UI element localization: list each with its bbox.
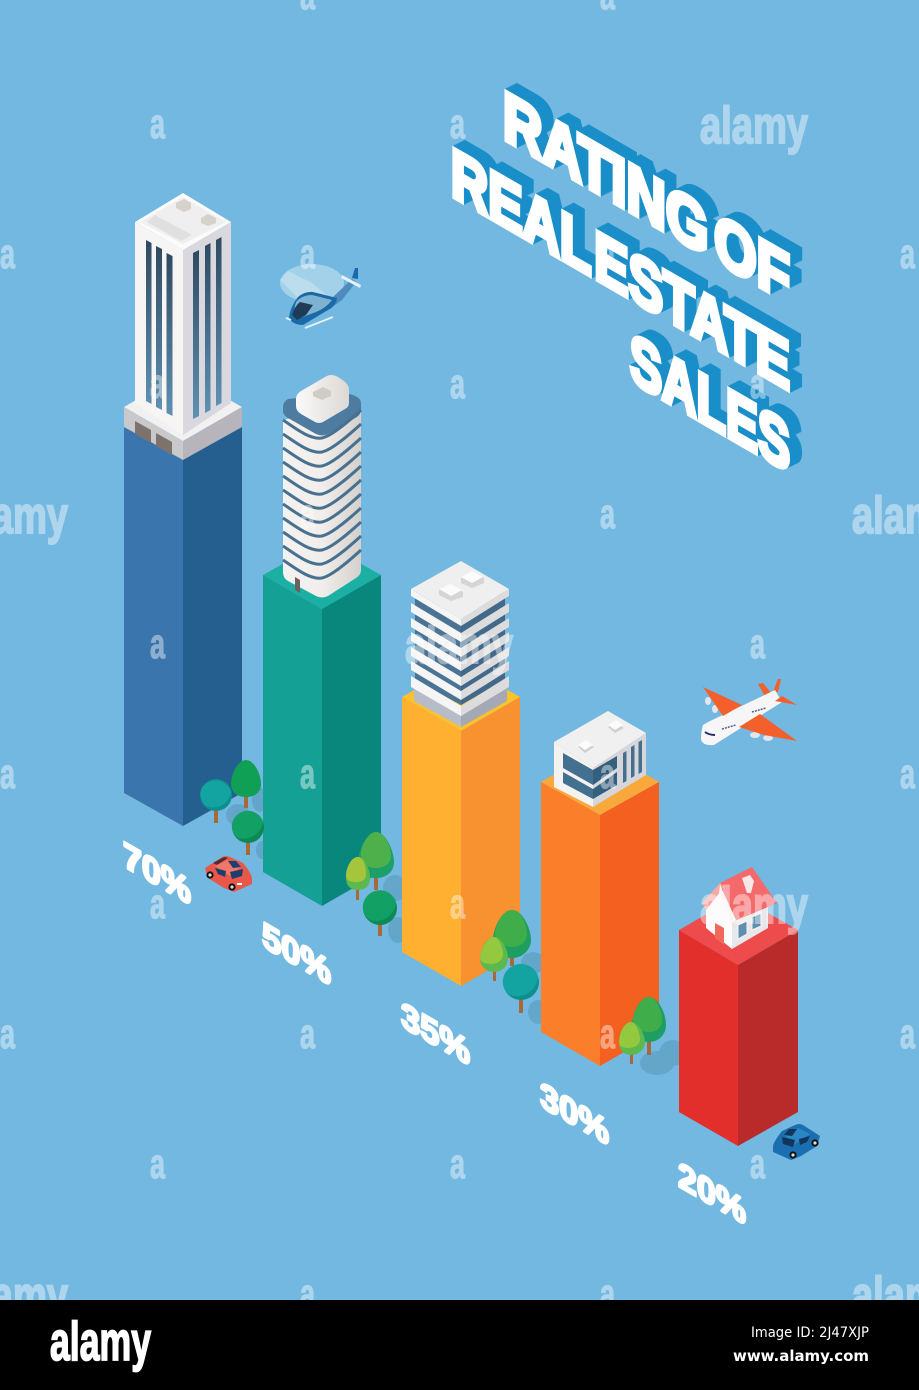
watermarks: a bbox=[600, 750, 615, 797]
tree group: beside teal bar bbox=[346, 832, 397, 936]
watermarks: a bbox=[150, 1140, 165, 1187]
icon: red car bbox=[205, 856, 252, 892]
title: REAL ESTATE bbox=[451, 133, 790, 405]
tree group: beside orange bar bbox=[619, 997, 666, 1064]
bar: 50% teal bbox=[263, 542, 381, 906]
footer bar bbox=[0, 1300, 919, 1390]
bar: 30% orange bbox=[541, 748, 659, 1066]
watermarks: a bbox=[0, 1010, 15, 1057]
building: low office on orange bar bbox=[554, 711, 646, 807]
bar: 20% red bbox=[679, 896, 798, 1146]
building: house on red bar bbox=[702, 867, 777, 949]
percentage labels: 50% bbox=[262, 915, 331, 994]
watermarks: a bbox=[600, 230, 615, 277]
watermarks: a bbox=[450, 360, 465, 407]
watermarks: a bbox=[750, 620, 765, 667]
watermarks: a bbox=[600, 1010, 615, 1057]
watermarks: a bbox=[600, 1270, 615, 1317]
watermarks: a bbox=[450, 880, 465, 927]
percentage labels: 70% bbox=[123, 835, 191, 914]
percentage labels: 20% bbox=[678, 1155, 746, 1234]
watermarks: a bbox=[300, 750, 315, 797]
watermarks: alamy bbox=[700, 877, 808, 935]
watermarks: a bbox=[450, 1140, 465, 1187]
watermarks: a bbox=[300, 1270, 315, 1317]
title: SALES bbox=[630, 318, 790, 487]
watermarks: alamy bbox=[405, 617, 513, 675]
watermarks: a bbox=[0, 750, 15, 797]
watermarks: a bbox=[600, 490, 615, 537]
building: office block on yellow bar bbox=[411, 561, 509, 727]
watermarks: a bbox=[150, 620, 165, 667]
website: www.alamy.com bbox=[733, 1347, 869, 1365]
image id: Image ID: 2J47XJP bbox=[751, 1325, 869, 1341]
percentage labels: 35% bbox=[401, 995, 470, 1074]
percentage labels bbox=[123, 835, 746, 1234]
watermarks: a bbox=[300, 490, 315, 537]
watermarks: a bbox=[0, 230, 15, 277]
tree group: beside blue bar bbox=[200, 760, 264, 855]
watermarks: a bbox=[150, 880, 165, 927]
icon: helicopter bbox=[280, 264, 361, 328]
watermarks: a bbox=[750, 1140, 765, 1187]
icon: airplane bbox=[701, 679, 797, 745]
building: rounded tower on teal bar bbox=[283, 375, 361, 598]
bar: 35% yellow bbox=[402, 663, 520, 986]
tree shadows bbox=[226, 788, 687, 1075]
title: RATING OF bbox=[503, 76, 790, 318]
footer logo: alamy bbox=[50, 1310, 151, 1372]
bar: 70% blue bbox=[124, 420, 242, 826]
watermarks: a bbox=[300, 230, 315, 277]
icon: blue car bbox=[773, 1124, 820, 1160]
watermarks: a bbox=[150, 100, 165, 147]
watermarks: a bbox=[750, 360, 765, 407]
title bbox=[451, 76, 790, 487]
watermarks: a bbox=[150, 360, 165, 407]
watermarks: a bbox=[450, 100, 465, 147]
tree group: beside yellow bar bbox=[480, 910, 539, 1013]
watermarks: a bbox=[300, 1010, 315, 1057]
building: skyscraper on blue bar bbox=[124, 193, 242, 460]
watermarks: alamy bbox=[700, 97, 808, 155]
percentage labels: 30% bbox=[540, 1075, 609, 1154]
